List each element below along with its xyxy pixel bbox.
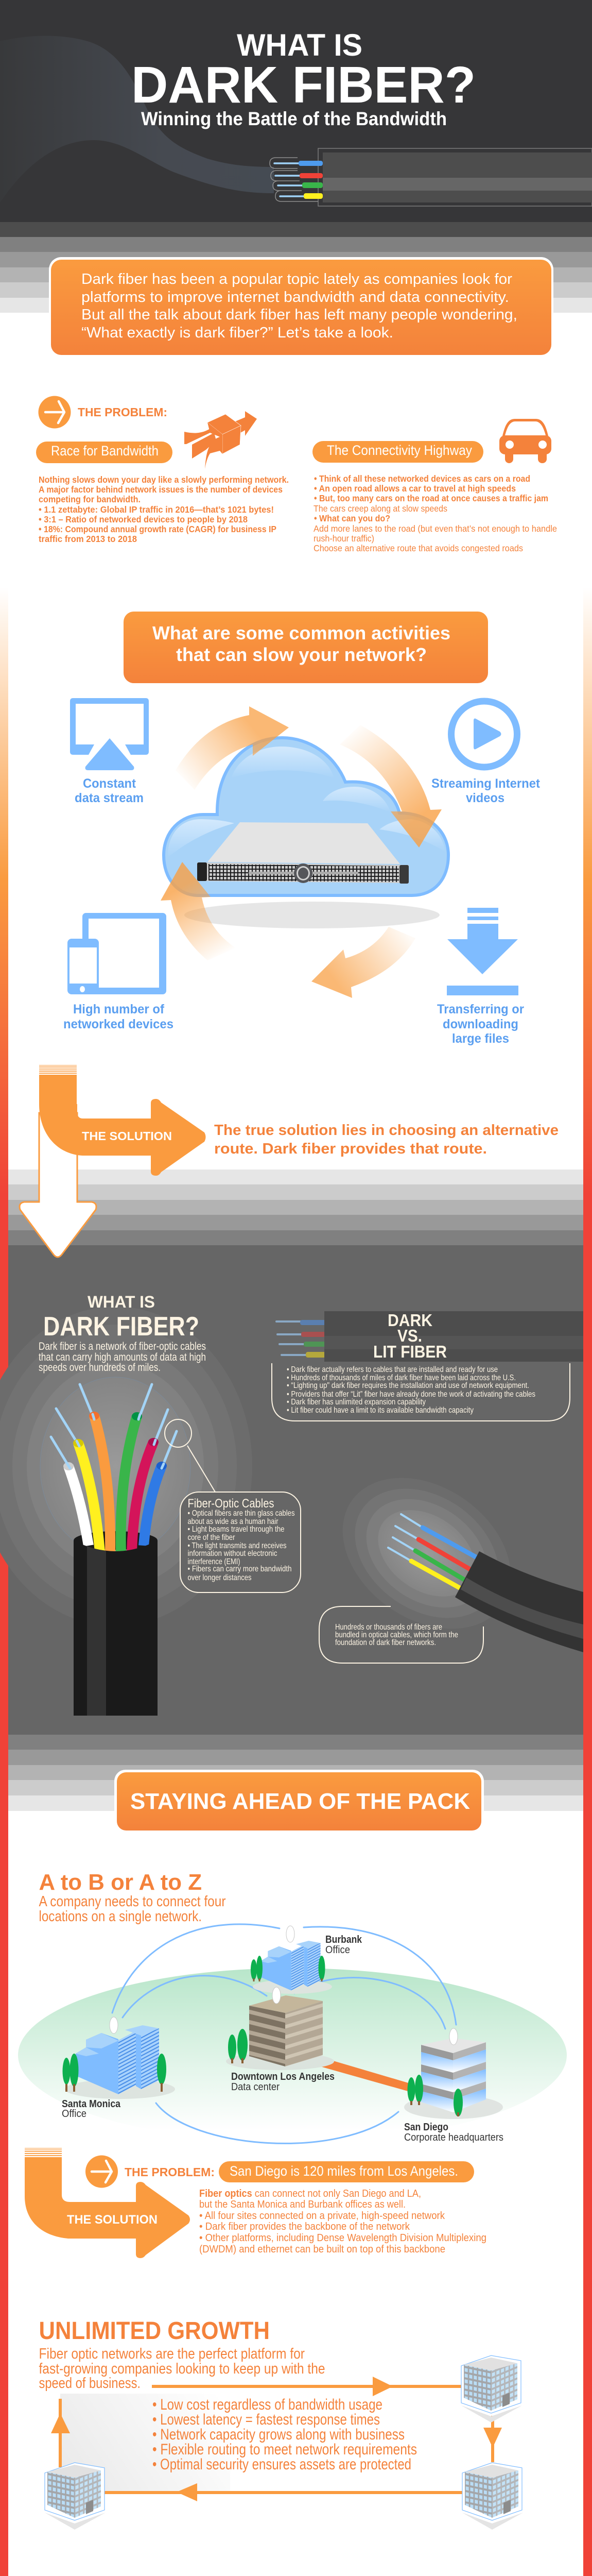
text: definition: Dark fiber is a network of fiber-optic cables xyxy=(39,1341,206,1352)
label: high number of networked devices: High number of xyxy=(73,1002,165,1016)
illustration: fiber optic cable xyxy=(51,1384,177,1716)
panel: intro callout xyxy=(49,257,553,357)
callout: fiber-optic cables: • Light beams travel through the xyxy=(187,1525,285,1534)
arrow: orange elbow: THE SOLUTION xyxy=(82,1129,172,1143)
callout: fiber-optic cables: over longer distances xyxy=(187,1573,251,1582)
text: fiber optics solution: Fiber optics can connect not only San Diego and LA, xyxy=(199,2188,421,2199)
heading xyxy=(43,1293,199,1342)
text: solution statement xyxy=(214,1122,559,1157)
label: san diego: San Diego xyxy=(404,2122,448,2133)
callout: fiber-optic cables: information without electronic xyxy=(187,1549,277,1558)
text: connectivity highway: • An open road allows a car to travel at high speeds xyxy=(314,483,516,494)
arrow: solution elbow: THE SOLUTION xyxy=(67,2213,158,2227)
heading: the problem: THE PROBLEM: xyxy=(125,2165,215,2179)
text: fiber optics solution: • Dark fiber provides the backbone of the network xyxy=(199,2221,410,2232)
panel: dark vs lit fiber xyxy=(272,1311,583,1663)
panel: intro callout: Dark fiber has been a popular topic lately as companies look for xyxy=(81,271,512,287)
panel: the solution xyxy=(20,1065,559,1257)
callout: comparison list: • “Lighting up" dark fiber requires the installation and use of network equipment. xyxy=(287,1381,529,1390)
icon: building top right xyxy=(461,2355,522,2422)
text: intro xyxy=(39,2346,325,2392)
arrow: bottom right xyxy=(311,927,415,998)
heading: a to b or a to z: A to B or A to Z xyxy=(39,1870,202,1895)
label: santa monica xyxy=(62,2098,121,2120)
callout: fiber-optic cables: • The light transmits and receives xyxy=(187,1541,286,1550)
heading: DARK FIBER? xyxy=(43,1312,199,1342)
text: benefits list: • Low cost regardless of bandwidth usage xyxy=(152,2396,382,2413)
text: subheading xyxy=(39,1893,226,1925)
icon: muted fiber cable xyxy=(276,1311,583,1362)
label: transferring or downloading large files: large files xyxy=(452,1031,509,1046)
label: san diego: Corporate headquarters xyxy=(404,2132,503,2143)
label: san diego xyxy=(404,2122,503,2143)
text: connectivity highway: Choose an alternative route that avoids congested roads xyxy=(314,543,523,553)
text: connectivity highway: The cars creep along at slow speeds xyxy=(314,503,447,514)
icon: merging arrows through cube xyxy=(184,411,257,469)
text: connectivity highway: • But, too many cars on the road at once causes a traffic jam xyxy=(314,493,548,503)
label: downtown los angeles: Data center xyxy=(231,2081,280,2093)
callout: optical cables note xyxy=(319,1606,483,1663)
side rails xyxy=(0,587,592,2576)
icon: play button xyxy=(451,701,517,767)
heading: UNLIMITED GROWTH xyxy=(39,2317,270,2345)
label: high number of networked devices xyxy=(63,1002,173,1031)
callout: comparison list: • Hundreds of thousands of miles of dark fiber have been laid across the U.S. xyxy=(287,1374,516,1382)
text: fiber optics solution: • Other platforms, including Dense Wavelength Division Multiplexing xyxy=(199,2232,486,2244)
pill: race for bandwidth: Race for Bandwidth xyxy=(51,443,159,459)
callout: comparison list: • Dark fiber has unlimited expansion capability xyxy=(287,1398,426,1406)
icon: cloud with server xyxy=(164,738,448,895)
text: race for bandwidth xyxy=(39,474,289,544)
label: burbank: Office xyxy=(325,1944,350,1956)
panel: header xyxy=(0,0,592,313)
label: santa monica: Santa Monica xyxy=(62,2098,121,2110)
diagram: network map xyxy=(18,1924,567,2143)
text: connectivity highway xyxy=(314,473,557,553)
panel: staying ahead of the pack xyxy=(18,1770,567,2258)
callout: fiber-optic cables: • Optical fibers are thin glass cables xyxy=(187,1509,294,1518)
label: transferring or downloading large files xyxy=(437,1002,524,1046)
label: high number of networked devices: networked devices xyxy=(63,1017,173,1031)
text: race for bandwidth: • 3:1 – Ratio of networked devices to people by 2018 xyxy=(39,514,248,524)
text: solution statement: The true solution lies in choosing an alternative xyxy=(214,1122,559,1139)
pill: the connectivity highway: The Connectivity Highway xyxy=(327,443,472,458)
title: DARK FIBER? xyxy=(131,56,476,114)
arrow: left xyxy=(51,2399,70,2467)
callout: fiber-optic cables: core of the fiber xyxy=(187,1533,235,1542)
panel: unlimited growth xyxy=(39,2317,523,2530)
text: benefits list: • Network capacity grows along with business xyxy=(152,2426,405,2443)
heading: dark vs lit fiber: LIT FIBER xyxy=(373,1342,447,1361)
icon: arrow circle xyxy=(38,396,71,429)
text: race for bandwidth: • 1.1 zettabyte: Global IP traffic in 2016—that’s 1021 bytes! xyxy=(39,504,274,515)
panel: what is dark fiber xyxy=(0,1293,301,1716)
icon: tablet and phone xyxy=(67,913,166,994)
pill: san diego: San Diego is 120 miles from Los Angeles. xyxy=(230,2163,458,2179)
heading: dark vs lit fiber: VS. xyxy=(397,1326,422,1345)
text: fiber optics solution: but the Santa Monica and Burbank offices as well. xyxy=(199,2199,406,2210)
callout: fiber-optic cables: • Fibers can carry more bandwidth xyxy=(187,1565,291,1573)
pill: san diego xyxy=(219,2161,474,2182)
text: benefits list: • Lowest latency = fastest response times xyxy=(152,2411,380,2428)
text: connectivity highway: rush-hour traffic) xyxy=(314,533,374,544)
text: connectivity highway: • What can you do? xyxy=(314,513,390,523)
pill: the connectivity highway xyxy=(312,441,483,463)
label: downtown los angeles xyxy=(231,2071,335,2093)
label: burbank xyxy=(325,1934,362,1956)
shaded area xyxy=(60,2394,230,2493)
arrow: top xyxy=(152,2377,461,2396)
panel: common activities xyxy=(63,612,541,1046)
callout: comparison list: • Dark fiber actually refers to cables that are installed and ready for use xyxy=(287,1365,498,1374)
text: intro: fast-growing companies looking to keep up with the xyxy=(39,2361,325,2377)
text: fiber optics solution: • All four sites connected on a private, high-speed network xyxy=(199,2210,445,2222)
arrow: bottom left xyxy=(161,862,236,960)
text: fiber optics solution xyxy=(199,2188,486,2255)
network arcs xyxy=(112,1924,456,2143)
heading box: STAYING AHEAD OF THE PACK xyxy=(130,1789,470,1814)
heading box xyxy=(114,1770,484,1831)
icon: building bottom left xyxy=(45,2463,106,2530)
heading box: that can slow your network? xyxy=(176,644,427,665)
callout: comparison list: • Lit fiber could have a limit to its available bandwidth capacity xyxy=(287,1406,474,1415)
icon: download xyxy=(447,908,518,995)
label: transferring or downloading large files: downloading xyxy=(443,1017,518,1031)
text: intro: Fiber optic networks are the perfect platform for xyxy=(39,2346,305,2362)
icon: airplay screen xyxy=(70,698,149,770)
label: streaming internet videos: videos xyxy=(466,791,504,805)
building: downtown los angeles xyxy=(226,1995,334,2070)
title xyxy=(131,28,476,129)
label: downtown los angeles: Downtown Los Angeles xyxy=(231,2071,335,2082)
heading box xyxy=(124,612,488,683)
callout: fiber-optic cables: Fiber-Optic Cables xyxy=(187,1497,274,1511)
callout: comparison list xyxy=(272,1363,570,1421)
text: fiber optics solution: (DWDM) and ethernet can be built on top of this backbone xyxy=(199,2244,445,2255)
heading: dark vs lit fiber xyxy=(373,1311,447,1361)
text: definition: that can carry high amounts of data at high xyxy=(39,1351,206,1363)
text: intro: speed of business. xyxy=(39,2375,141,2392)
arrow: top right xyxy=(340,725,442,848)
title: WHAT IS xyxy=(237,28,362,62)
panel: the problem xyxy=(36,396,557,553)
road: fiber link xyxy=(300,2058,412,2092)
text: benefits list: • Flexible routing to meet network requirements xyxy=(152,2441,417,2458)
label: burbank: Burbank xyxy=(325,1934,362,1945)
text: race for bandwidth: • 18%: Compound annual growth rate (CAGR) for business IP xyxy=(39,524,276,534)
title: Winning the Battle of the Bandwidth xyxy=(141,108,447,129)
text: connectivity highway: Add more lanes to the road (but even that’s not enough to handle xyxy=(314,523,557,534)
label: constant data stream xyxy=(75,776,144,805)
panel: intro callout: platforms to improve internet bandwidth and data connectivity. xyxy=(81,289,509,306)
callout: comparison list: • Providers that offer “Lit” fiber have already done the work of activating the cables xyxy=(287,1390,535,1399)
text: solution statement: route. Dark fiber provides that route. xyxy=(214,1141,487,1157)
callout: fiber-optic cables: interference (EMI) xyxy=(187,1557,240,1566)
icon: car xyxy=(499,419,551,463)
heading: the problem: THE PROBLEM: xyxy=(78,405,167,419)
label: constant data stream: Constant xyxy=(83,776,136,791)
heading: dark vs lit fiber: DARK xyxy=(388,1311,432,1330)
label: transferring or downloading large files: Transferring or xyxy=(437,1002,524,1016)
icon: flat fiber cable xyxy=(270,148,592,206)
text: race for bandwidth: traffic from 2013 to 2018 xyxy=(39,534,137,544)
ground xyxy=(18,1968,567,2142)
text: definition xyxy=(39,1341,206,1374)
callout: fiber-optic cables xyxy=(165,1419,301,1592)
text: subheading: locations on a single network. xyxy=(39,1908,202,1925)
heading: WHAT IS xyxy=(88,1293,155,1311)
illustration: bundled cable with glow xyxy=(314,1447,583,1660)
text: definition: speeds over hundreds of miles. xyxy=(39,1362,161,1374)
label: streaming internet videos: Streaming Internet xyxy=(431,776,541,791)
panel: dark section gradient stripes xyxy=(8,1170,583,1811)
heading box: What are some common activities xyxy=(152,622,450,643)
arrow: right xyxy=(483,2416,502,2462)
swoosh of light xyxy=(0,36,274,202)
label: constant data stream: data stream xyxy=(75,791,144,805)
building: santa monica xyxy=(63,2025,175,2099)
panel: intro callout: “What exactly is dark fiber?” Let’s take a look. xyxy=(81,325,393,341)
text: benefits list: • Optimal security ensures assets are protected xyxy=(152,2456,411,2473)
building: burbank xyxy=(251,1941,332,1994)
pill: race for bandwidth xyxy=(36,442,172,463)
text: connectivity highway: • Think of all these networked devices as cars on a road xyxy=(314,473,530,484)
callout: optical cables note: foundation of dark fiber networks. xyxy=(335,1638,436,1647)
panel: intro callout: But all the talk about dark fiber has left many people wondering, xyxy=(81,307,517,323)
text: race for bandwidth: competing for bandwidth. xyxy=(39,494,141,504)
callout: fiber-optic cables: about as wide as a human hair xyxy=(187,1517,278,1526)
arrow: orange elbow xyxy=(39,1065,206,1176)
text: subheading: A company needs to connect four xyxy=(39,1893,226,1910)
label: santa monica: Office xyxy=(62,2108,86,2120)
arrow: white down arrow xyxy=(20,1113,96,1257)
building: san diego xyxy=(404,2038,503,2119)
glow behind fibers xyxy=(0,1307,252,1626)
network nodes xyxy=(110,1926,458,2045)
text: race for bandwidth: Nothing slows down your day like a slowly performing network. xyxy=(39,474,289,485)
callout: optical cables note: Hundreds or thousands of fibers are xyxy=(335,1623,442,1632)
arrow: bottom xyxy=(104,2483,462,2501)
callout: optical cables note: bundled in optical cables, which form the xyxy=(335,1631,458,1639)
icon: building bottom right xyxy=(462,2463,523,2530)
arrow: solution elbow xyxy=(25,2148,190,2258)
label: streaming internet videos xyxy=(431,776,541,805)
icon: arrow circle xyxy=(85,2156,118,2188)
text: benefits list xyxy=(152,2396,417,2473)
arrow: top left xyxy=(176,706,289,790)
text: race for bandwidth: A major factor behind network issues is the number of devices xyxy=(39,484,283,495)
icon: shadow below cloud xyxy=(184,902,440,928)
